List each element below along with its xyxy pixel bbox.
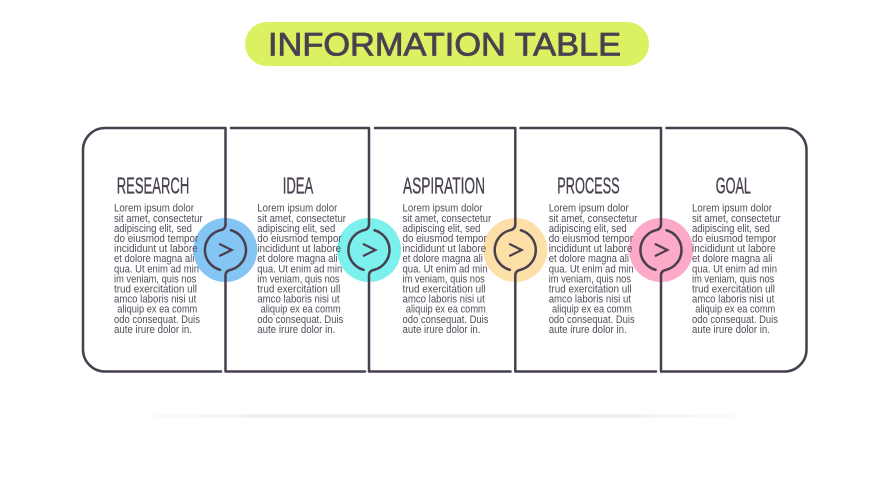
- body text: aspiration: aute irure dolor in.: [402, 324, 480, 336]
- body text: process: incididunt ut labore: [549, 243, 632, 255]
- body text: process: Lorem ipsum dolor: [549, 203, 629, 215]
- panel: idea: [226, 128, 369, 372]
- body text: idea: aliquip ex ea comm: [261, 304, 341, 316]
- body text: research: aute irure dolor in.: [114, 324, 192, 336]
- body text: research: do eiusmod tempor: [114, 233, 199, 245]
- body text: idea: aute irure dolor in.: [257, 324, 335, 336]
- body text: aspiration: do eiusmod tempor: [402, 233, 487, 245]
- body text: idea: adipiscing elit, sed: [257, 223, 335, 235]
- body text: process: [549, 203, 638, 336]
- body text: aspiration: trud exercitation ull: [402, 284, 486, 296]
- body text: idea: odo consequat. Duis: [257, 314, 344, 326]
- body text: aspiration: amco laboris nisi ut: [402, 294, 485, 306]
- panel: goal: [661, 128, 806, 372]
- body text: aspiration: qua. Ut enim ad min: [402, 263, 488, 275]
- body text: idea: im veniam, quis nos: [257, 273, 340, 285]
- body text: aspiration: et dolore magna ali: [402, 253, 483, 265]
- body text: aspiration: Lorem ipsum dolor: [402, 203, 483, 215]
- body text: aspiration: aliquip ex ea comm: [406, 304, 486, 316]
- body text: process: amco laboris nisi ut: [549, 294, 631, 306]
- body text: research: qua. Ut enim ad min: [114, 263, 199, 275]
- body text: process: aliquip ex ea comm: [552, 304, 632, 316]
- heading: idea: IDEA: [283, 173, 313, 199]
- body text: goal: Lorem ipsum dolor: [692, 203, 772, 215]
- body text: research: incididunt ut labore: [114, 243, 198, 255]
- ground shadow: [125, 414, 765, 418]
- panel: research: [83, 128, 226, 372]
- body text: idea: sit amet, consectetur: [257, 213, 346, 225]
- body text: process: odo consequat. Duis: [549, 314, 635, 326]
- body text: research: Lorem ipsum dolor: [114, 203, 194, 215]
- body text: aspiration: incididunt ut labore: [402, 243, 486, 255]
- body text: idea: do eiusmod tempor: [257, 233, 342, 245]
- body text: process: aute irure dolor in.: [549, 324, 627, 336]
- body text: goal: amco laboris nisi ut: [692, 294, 774, 306]
- body text: goal: odo consequat. Duis: [692, 314, 778, 326]
- heading: goal: GOAL: [716, 173, 751, 199]
- body text: idea: et dolore magna ali: [257, 253, 338, 265]
- body text: research: et dolore magna ali: [114, 253, 194, 265]
- title banner: [245, 22, 649, 66]
- body text: research: trud exercitation ull: [114, 284, 197, 296]
- panel: aspiration: [369, 128, 515, 372]
- body text: aspiration: adipiscing elit, sed: [402, 223, 480, 235]
- body text: aspiration: sit amet, consectetur: [402, 213, 491, 225]
- body text: research: amco laboris nisi ut: [114, 294, 196, 306]
- body text: idea: amco laboris nisi ut: [257, 294, 340, 306]
- body text: aspiration: odo consequat. Duis: [402, 314, 489, 326]
- body text: process: adipiscing elit, sed: [549, 223, 627, 235]
- body text: goal: im veniam, quis nos: [692, 273, 775, 285]
- body text: goal: do eiusmod tempor: [692, 233, 777, 245]
- badge: orange arrow circle: [483, 218, 547, 282]
- body text: process: do eiusmod tempor: [549, 233, 633, 245]
- heading: research: RESEARCH: [117, 173, 189, 199]
- body text: research: sit amet, consectetur: [114, 213, 203, 225]
- body text: process: im veniam, quis nos: [549, 273, 631, 285]
- body text: aspiration: [402, 203, 491, 336]
- body text: goal: qua. Ut enim ad min: [692, 263, 777, 275]
- body text: goal: aliquip ex ea comm: [695, 304, 775, 316]
- panel: process: [515, 128, 661, 372]
- body text: research: [114, 203, 203, 336]
- body text: idea: qua. Ut enim ad min: [257, 263, 342, 275]
- body text: idea: Lorem ipsum dolor: [257, 203, 338, 215]
- badge: pink arrow circle: [629, 218, 693, 282]
- body text: goal: incididunt ut labore: [692, 243, 776, 255]
- body text: research: aliquip ex ea comm: [117, 304, 197, 316]
- body text: idea: [257, 203, 346, 336]
- body text: goal: [692, 203, 781, 336]
- body text: idea: incididunt ut labore: [257, 243, 341, 255]
- body text: goal: adipiscing elit, sed: [692, 223, 770, 235]
- body text: aspiration: im veniam, quis nos: [402, 273, 485, 285]
- heading: process: PROCESS: [557, 173, 620, 199]
- body text: process: sit amet, consectetur: [549, 213, 638, 225]
- body text: research: im veniam, quis nos: [114, 273, 197, 285]
- badge: blue arrow circle: [193, 218, 257, 282]
- title text: INFORMATION TABLE: [268, 27, 621, 63]
- heading: aspiration: ASPIRATION: [403, 173, 485, 199]
- body text: process: trud exercitation ull: [549, 284, 632, 296]
- body text: goal: trud exercitation ull: [692, 284, 775, 296]
- body text: process: et dolore magna ali: [549, 253, 629, 265]
- body text: goal: aute irure dolor in.: [692, 324, 770, 336]
- body text: goal: sit amet, consectetur: [692, 213, 781, 225]
- body text: idea: trud exercitation ull: [257, 284, 340, 296]
- body text: process: qua. Ut enim ad min: [549, 263, 634, 275]
- body text: research: odo consequat. Duis: [114, 314, 200, 326]
- body text: research: adipiscing elit, sed: [114, 223, 192, 235]
- body text: goal: et dolore magna ali: [692, 253, 772, 265]
- badge: cyan arrow circle: [337, 218, 401, 282]
